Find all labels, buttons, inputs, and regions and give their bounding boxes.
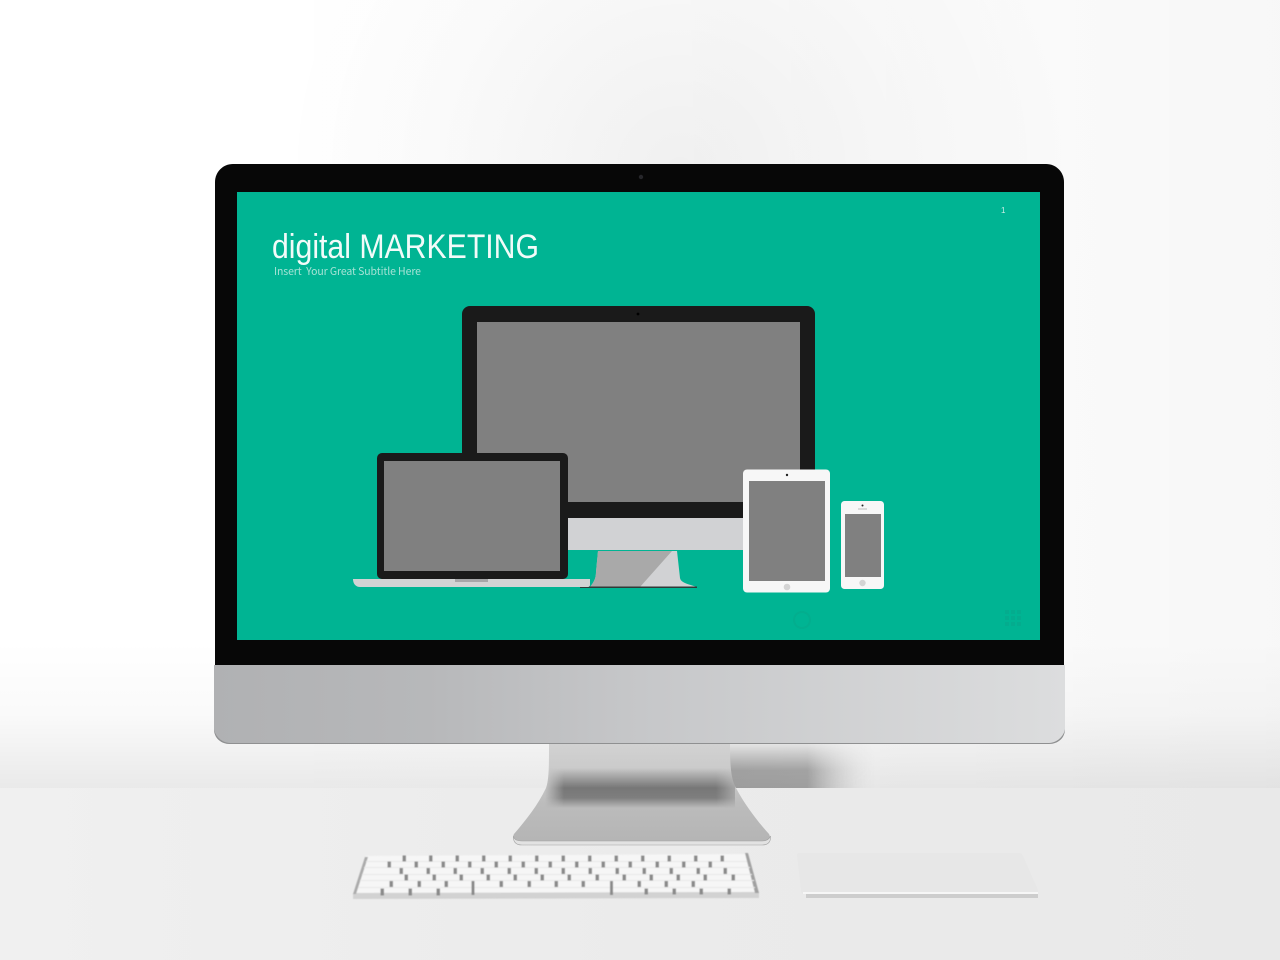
monitor silver chin bbox=[214, 665, 1065, 744]
webcam bbox=[639, 175, 643, 179]
title: digital MARKETING bbox=[272, 228, 539, 266]
subtitle: Insert Your Great Subtitle Here bbox=[274, 264, 421, 279]
monitor bezel bbox=[215, 164, 1064, 666]
device: desktop monitor bbox=[462, 306, 815, 588]
slide screen bbox=[237, 192, 1040, 640]
monitor stand bbox=[513, 744, 771, 845]
device: smartphone bbox=[841, 501, 884, 589]
faint icon: circle bbox=[794, 612, 810, 628]
page number: 1 bbox=[1001, 206, 1006, 215]
device: tablet bbox=[743, 470, 830, 592]
large monitor bbox=[214, 164, 1065, 744]
faint icon: grid bbox=[1005, 610, 1021, 626]
trackpad bbox=[797, 853, 1038, 898]
device: laptop bbox=[353, 453, 590, 587]
keyboard bbox=[353, 853, 759, 899]
key gaps bbox=[403, 856, 406, 861]
stand base rim bbox=[513, 836, 771, 845]
stand neck and base bbox=[513, 744, 770, 843]
